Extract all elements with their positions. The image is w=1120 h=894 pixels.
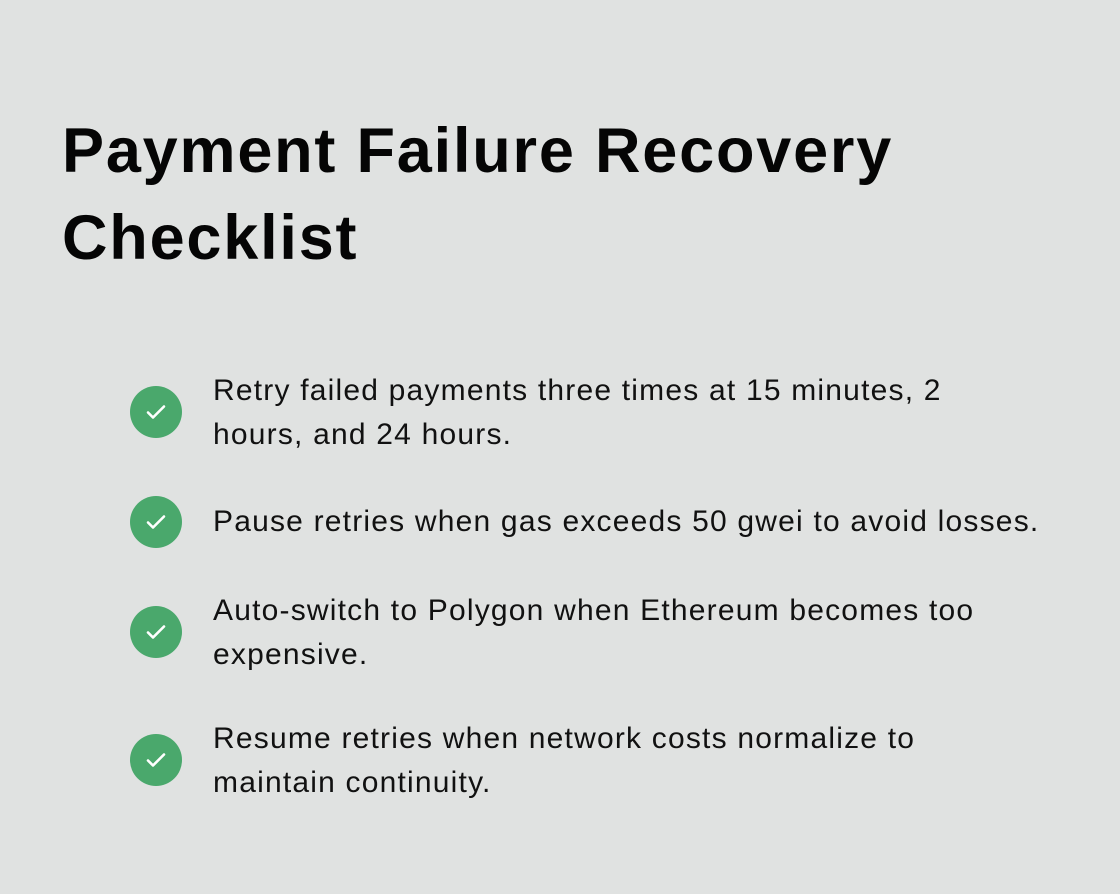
text 4 [213,722,915,799]
text 1: hours, and 24 hours. [213,418,512,451]
text 1: Retry failed payments three times at 15 minutes, 2 [213,374,942,407]
item 3 [130,594,974,671]
text 4: maintain continuity. [213,766,492,799]
item 4 [130,722,915,799]
text 3: Auto-switch to Polygon when Ethereum becomes too [213,594,974,627]
title [62,116,893,273]
title: Payment Failure Recovery [62,116,893,186]
text 3 [213,594,974,671]
icon: check 1 [130,386,182,438]
title: Checklist [62,203,358,273]
text 3: expensive. [213,638,368,671]
icon: check 3 [130,606,182,658]
item 2 [130,496,1039,548]
text 2: Pause retries when gas exceeds 50 gwei to avoid losses. [213,505,1039,538]
icon: check 2 [130,496,182,548]
item 1 [130,374,942,451]
icon: check 4 [130,734,182,786]
text 4: Resume retries when network costs normalize to [213,722,915,755]
text 1 [213,374,942,451]
